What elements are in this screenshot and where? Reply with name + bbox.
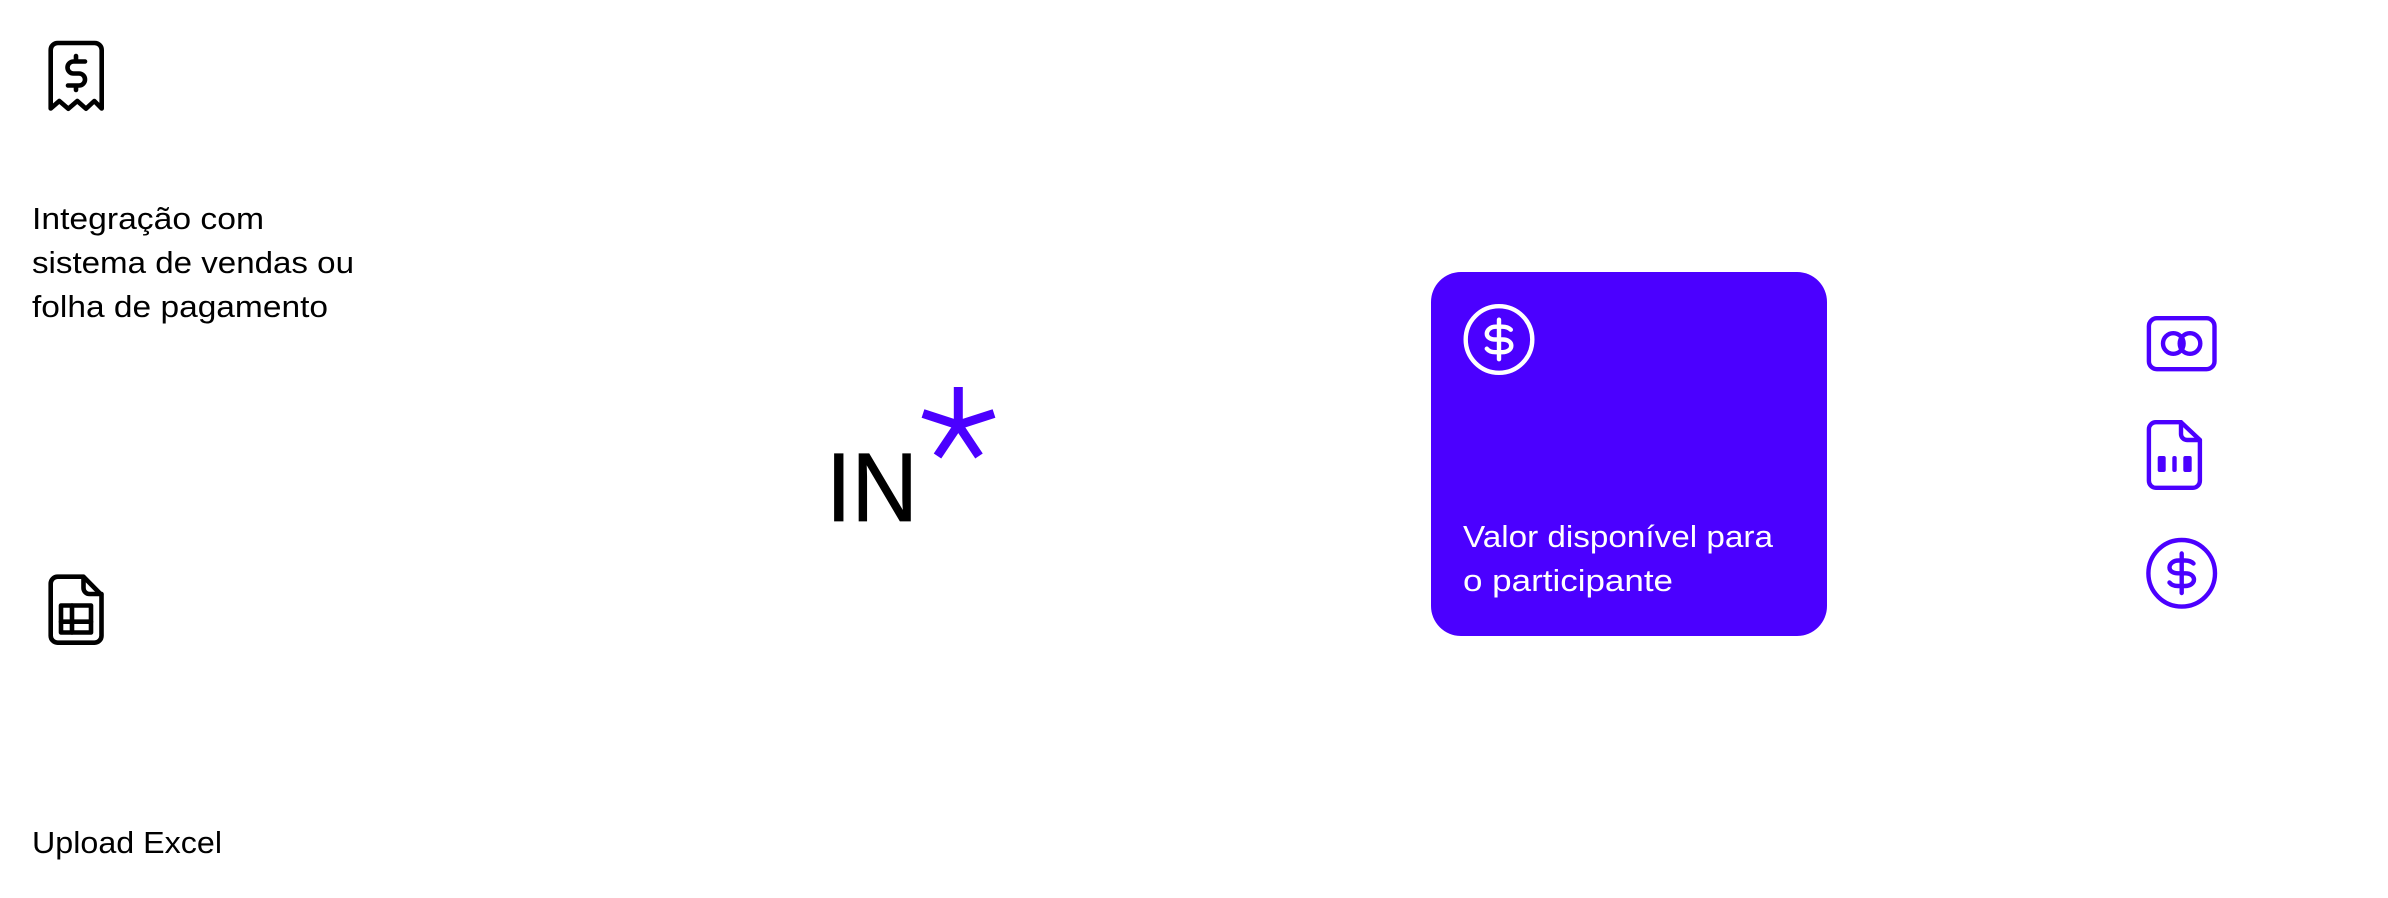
text: card label: Valor disponível para [1463,519,1774,554]
text: card label: o participante [1463,563,1673,598]
panel: available value card [1431,272,1827,636]
logo asterisk [923,387,994,456]
card background [1431,272,1827,636]
file bars [2158,456,2192,472]
icon: credit card [2149,318,2214,369]
icon: report file [2149,422,2200,488]
logo wordmark: IN [826,433,918,542]
icon: dollar coin white [1466,306,1532,373]
text: integration description: sistema de vendas ou [32,245,354,280]
icon: spreadsheet file [51,577,102,643]
text: integration description: Integração com [32,201,264,236]
text: upload excel: Upload Excel [32,825,222,860]
icon: dollar coin blue [2148,540,2215,607]
logo: IN asterisk [826,387,994,542]
text: integration description: folha de pagamento [32,289,328,324]
icon: receipt with dollar sign [51,43,102,109]
file outline [2149,422,2200,488]
